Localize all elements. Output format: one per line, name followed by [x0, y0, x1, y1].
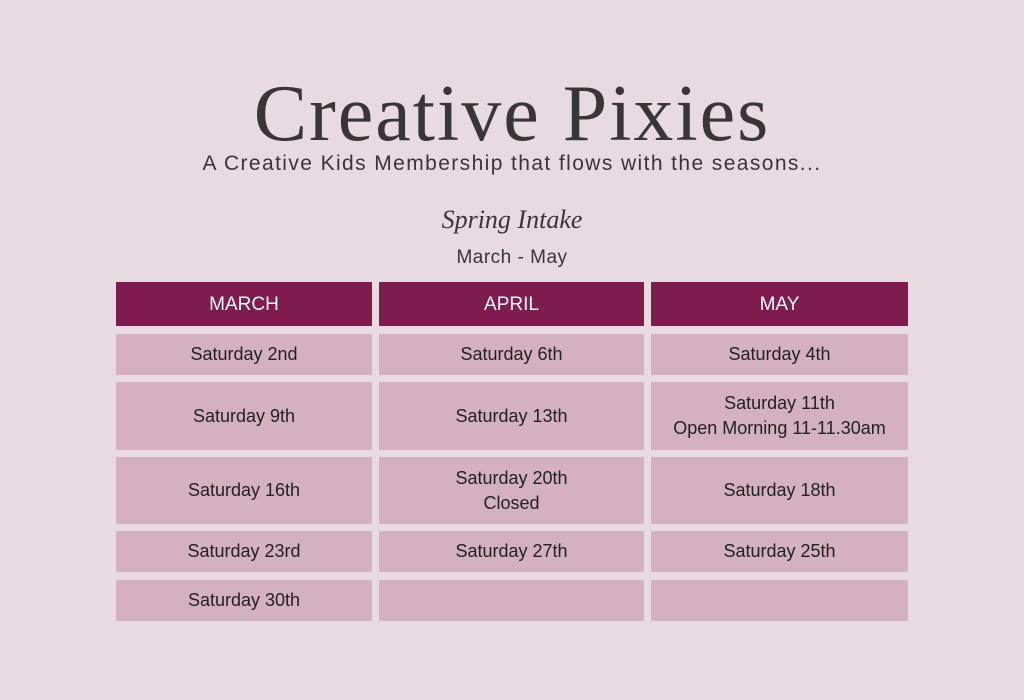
- schedule table: [116, 282, 908, 621]
- title: Creative Pixies: [254, 70, 770, 158]
- header: april: APRIL: [484, 294, 539, 314]
- schedule table: Saturday 30th: [188, 590, 300, 610]
- subtitle: A Creative Kids Membership that flows with the seasons...: [202, 152, 822, 175]
- schedule table: Saturday 2nd: [190, 344, 298, 364]
- schedule table: Saturday 18th: [723, 480, 836, 500]
- schedule table: Saturday 27th: [455, 541, 568, 561]
- header: april: [379, 282, 644, 326]
- header: march: MARCH: [209, 294, 279, 314]
- schedule table: Closed: [483, 492, 540, 512]
- schedule table: Saturday 23rd: [187, 541, 301, 561]
- schedule table: Saturday 16th: [188, 480, 300, 500]
- schedule table: Saturday 9th: [193, 406, 295, 426]
- schedule table: Saturday 25th: [723, 541, 836, 561]
- schedule table: Saturday 4th: [728, 344, 831, 364]
- schedule table: Saturday 13th: [455, 406, 568, 426]
- date range: March - May: [456, 247, 568, 268]
- header: may: MAY: [760, 294, 799, 314]
- schedule table: Saturday 6th: [460, 344, 563, 364]
- schedule table: Saturday 11th: [724, 393, 835, 413]
- header: march: [116, 282, 372, 326]
- header: may: [651, 282, 908, 326]
- schedule table: Open Morning 11-11.30am: [673, 418, 886, 438]
- schedule table: Saturday 20th: [455, 468, 568, 488]
- script heading: Spring Intake: [442, 205, 582, 234]
